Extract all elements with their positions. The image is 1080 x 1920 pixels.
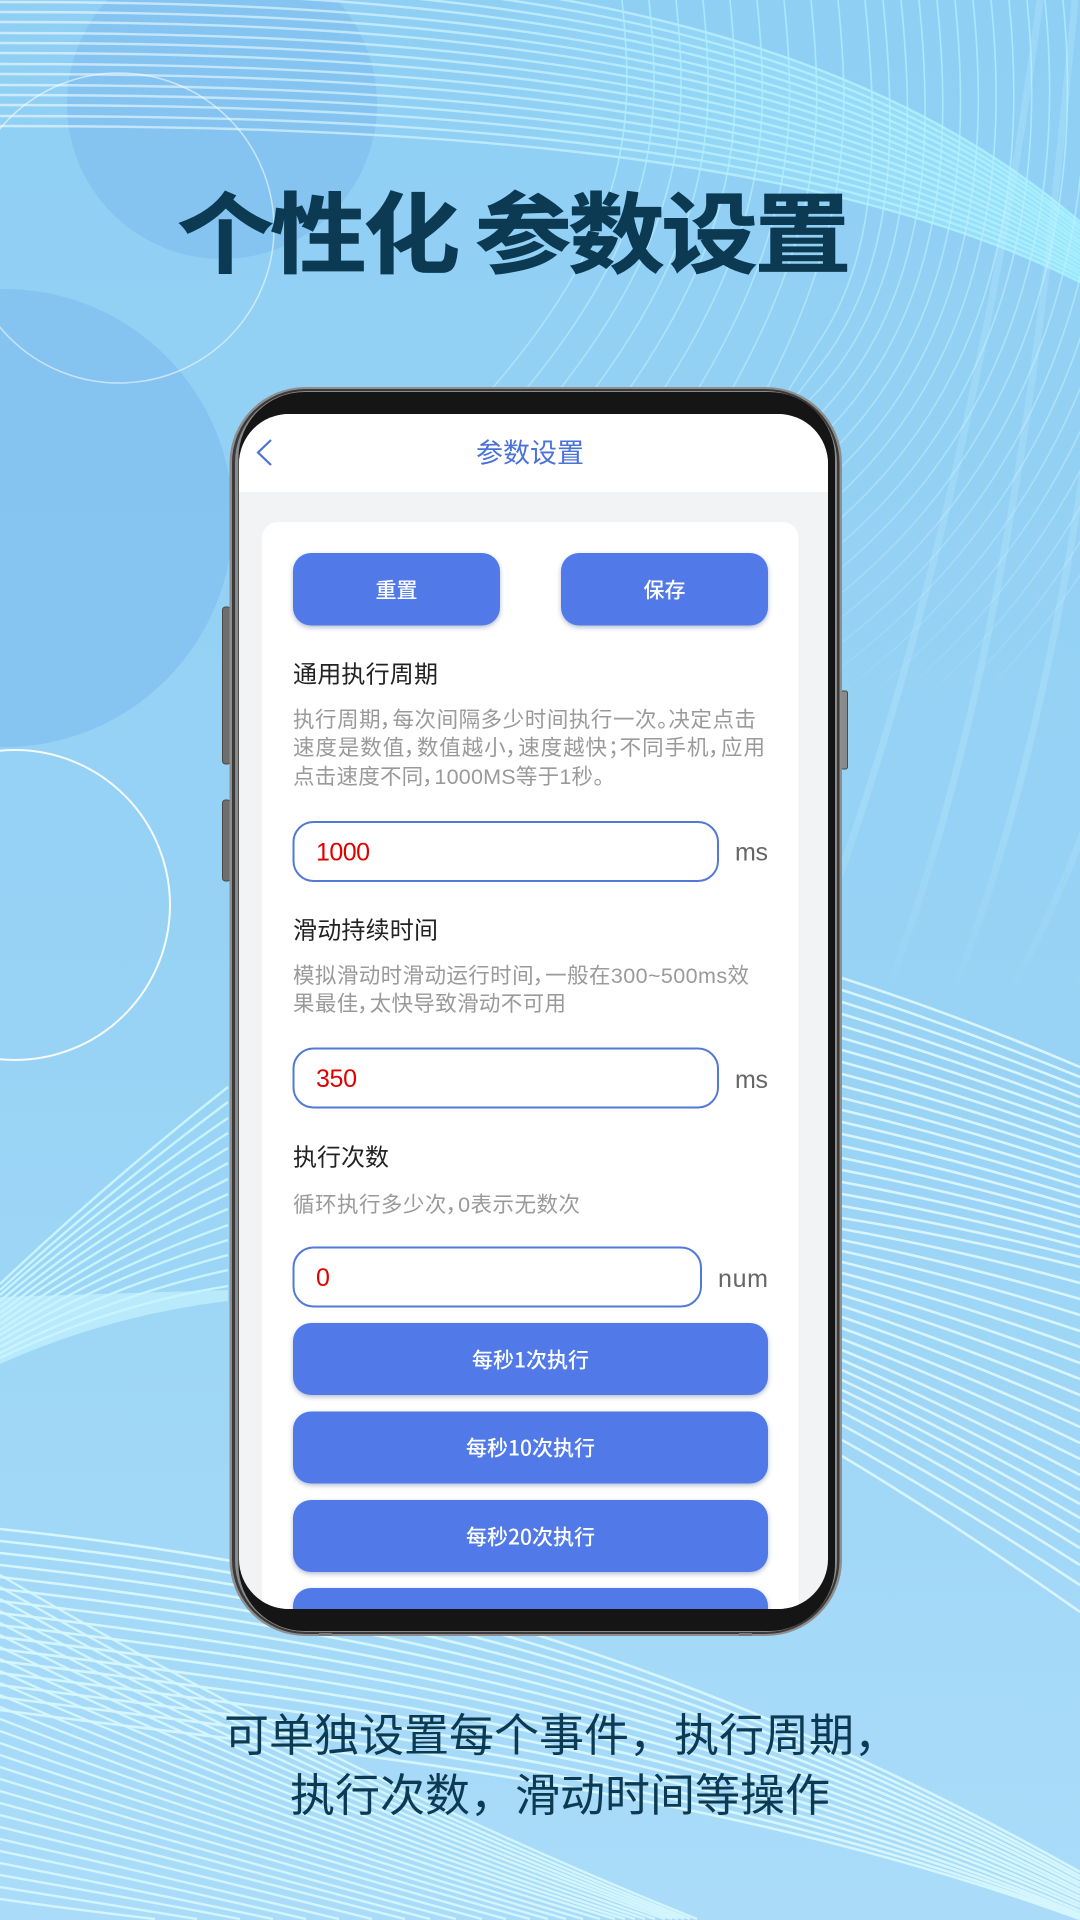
input: cycle	[294, 822, 718, 881]
settings card	[262, 522, 798, 1660]
phone body	[230, 387, 842, 1636]
description: swipe	[293, 964, 749, 1016]
input: swipe: 350	[316, 1065, 357, 1093]
button: reset	[293, 553, 500, 626]
description: cycle: 速度是数值，数值越小，速度越快；不同手机，应用	[293, 736, 765, 760]
screen title: 参数设置	[476, 432, 584, 470]
icon: back chevron	[258, 440, 271, 465]
input: count	[294, 1248, 701, 1306]
button: 1 per second	[293, 1323, 768, 1395]
input: cycle: 1000	[316, 838, 370, 866]
side buttons	[222, 607, 848, 881]
description: swipe: 模拟滑动时滑动运行时间，一般在300~500ms效	[293, 964, 749, 988]
description: cycle: 执行周期，每次间隔多少时间执行一次。决定点击	[293, 708, 756, 732]
caption	[224, 1699, 899, 1824]
button: 10 per second	[293, 1412, 768, 1484]
unit ms: ms	[735, 838, 768, 866]
button: 20 per second: 每秒20次执行	[466, 1522, 595, 1552]
title: 个性化 参数设置	[177, 164, 851, 292]
description: swipe: 果最佳，太快导致滑动不可用	[293, 992, 566, 1016]
caption: 执行次数，滑动时间等操作	[290, 1759, 830, 1824]
input: swipe	[294, 1048, 718, 1108]
phone screen	[239, 414, 828, 1660]
button: partially hidden	[290, 1587, 771, 1609]
description: cycle: 点击速度不同，1000MS等于1秒。	[293, 765, 604, 789]
heading: swipe: 滑动持续时间	[293, 910, 438, 946]
input: count: 0	[316, 1264, 330, 1292]
description: count: 循环执行多少次，0表示无数次	[293, 1193, 580, 1217]
button: 20 per second	[293, 1500, 768, 1572]
button: save	[561, 553, 768, 626]
button: reset: 重置	[376, 574, 418, 604]
phone mockup	[222, 387, 848, 1660]
description: cycle	[293, 708, 765, 789]
caption: 可单独设置每个事件，执行周期，	[224, 1699, 899, 1764]
button: 10 per second: 每秒10次执行	[466, 1432, 595, 1462]
button: 1 per second: 每秒1次执行	[472, 1344, 589, 1374]
unit num: num	[718, 1265, 768, 1293]
button: save: 保存	[644, 574, 686, 604]
app header	[239, 414, 828, 492]
heading: count: 执行次数	[293, 1138, 389, 1172]
antenna marks	[319, 1633, 752, 1636]
unit ms: ms	[735, 1066, 768, 1094]
heading: cycle: 通用执行周期	[293, 654, 438, 690]
